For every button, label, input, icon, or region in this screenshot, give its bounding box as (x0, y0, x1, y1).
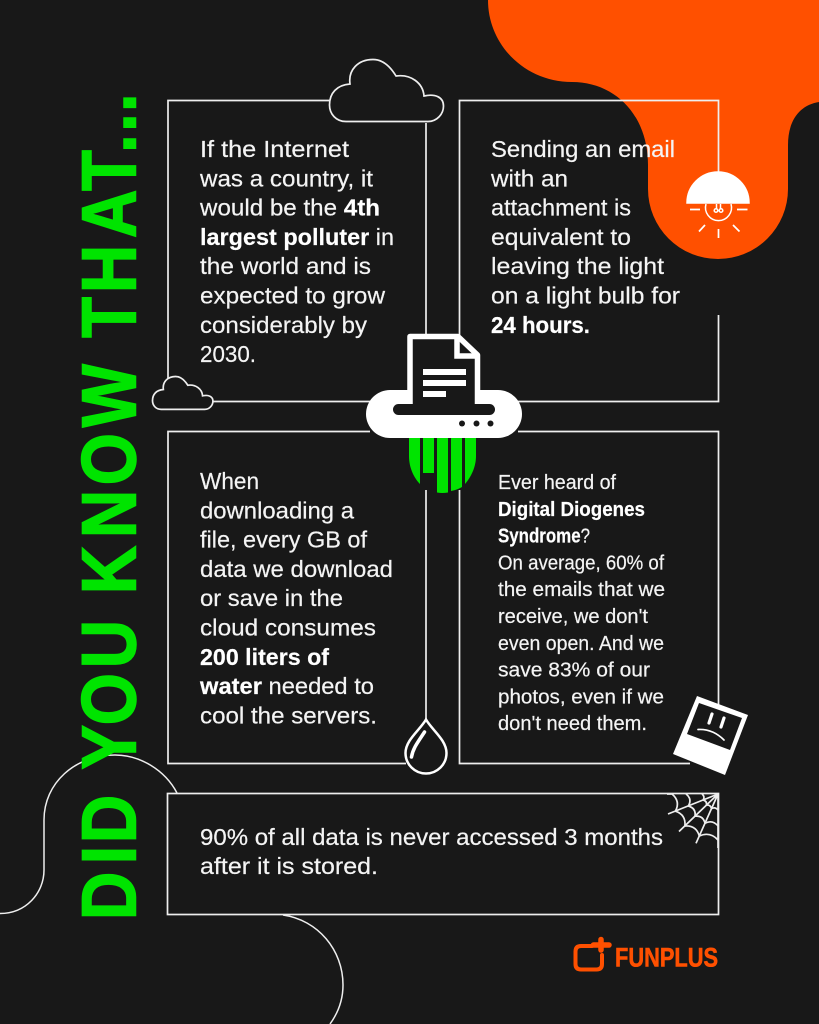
logo mark (576, 940, 609, 970)
text: internet pollution: would be the 4th (199, 195, 380, 221)
text: email attachment: attachment is (491, 195, 631, 221)
text: downloading water: or save in the (200, 585, 343, 611)
text: data never accessed: 90% of all data is never accessed 3 months (200, 824, 663, 850)
text: digital diogenes: don't need them. (498, 713, 647, 735)
text: digital diogenes: Digital Diogenes (498, 499, 645, 521)
text: internet pollution: If the Internet (200, 136, 349, 162)
icon: light bulb lamp (687, 172, 749, 238)
text: downloading water: When (200, 468, 259, 494)
text: internet pollution: 2030. (200, 341, 256, 367)
text: downloading water: 200 liters of (200, 644, 329, 670)
text: digital diogenes: receive, we don't (498, 606, 648, 628)
decorative curve: left (0, 755, 177, 914)
panel: downloading water (168, 432, 426, 764)
text: data never accessed: after it is stored. (200, 853, 378, 879)
text: email attachment: equivalent to (491, 224, 631, 250)
logo: funplus (576, 940, 718, 972)
icon: water drop (406, 720, 446, 773)
panel: data never accessed (168, 794, 718, 914)
panel: email attachment (460, 100, 718, 402)
text: digital diogenes: Ever heard of (498, 472, 616, 494)
shredder body (366, 390, 522, 438)
logo wordmark: FUNPLUS (615, 942, 718, 972)
text: downloading water: file, every GB of (200, 527, 367, 553)
text: email attachment: with an (490, 165, 568, 191)
text: email attachment: 24 hours. (491, 312, 590, 338)
text: digital diogenes: save 83% of our (498, 660, 650, 682)
text: digital diogenes: Syndrome? (498, 526, 590, 548)
text: email attachment: Sending an email (491, 136, 675, 162)
text: internet pollution (199, 136, 394, 367)
text: downloading water: water needed to (199, 673, 374, 699)
text: digital diogenes: photos, even if we (498, 686, 664, 708)
text: data never accessed (200, 824, 663, 879)
icon: sad photo (673, 696, 748, 775)
text: downloading water: downloading a (200, 497, 355, 523)
text: digital diogenes: the emails that we (498, 579, 665, 601)
icon: shredder (366, 336, 522, 493)
text: internet pollution: considerably by (200, 312, 367, 338)
text: digital diogenes: even open. And we (498, 633, 664, 655)
text: internet pollution: the world and is (200, 253, 371, 279)
orange blob (488, 0, 819, 259)
icon: small cloud (152, 376, 213, 409)
text: email attachment (490, 136, 680, 338)
decorative curve: bottom (283, 915, 343, 1024)
text: email attachment: leaving the light (491, 253, 664, 279)
text: downloading water (199, 468, 393, 728)
panel: digital diogenes (460, 432, 718, 764)
paper document (410, 336, 478, 409)
text: downloading water: cloud consumes (200, 614, 376, 640)
text: digital diogenes: On average, 60% of (498, 552, 664, 574)
text: downloading water: data we download (200, 556, 393, 582)
text: internet pollution: largest polluter in (200, 224, 394, 250)
panel: internet pollution (168, 100, 426, 402)
icon: large cloud (330, 60, 444, 122)
icon: spider web (667, 794, 718, 848)
text: downloading water: cool the servers. (200, 702, 377, 728)
text: email attachment: on a light bulb for (491, 282, 680, 308)
text: internet pollution: expected to grow (200, 282, 386, 308)
green shredded strips (409, 438, 476, 493)
text: digital diogenes (498, 472, 665, 735)
text: internet pollution: was a country, it (199, 165, 373, 191)
title: DID YOU KNOW THAT... (67, 93, 153, 920)
